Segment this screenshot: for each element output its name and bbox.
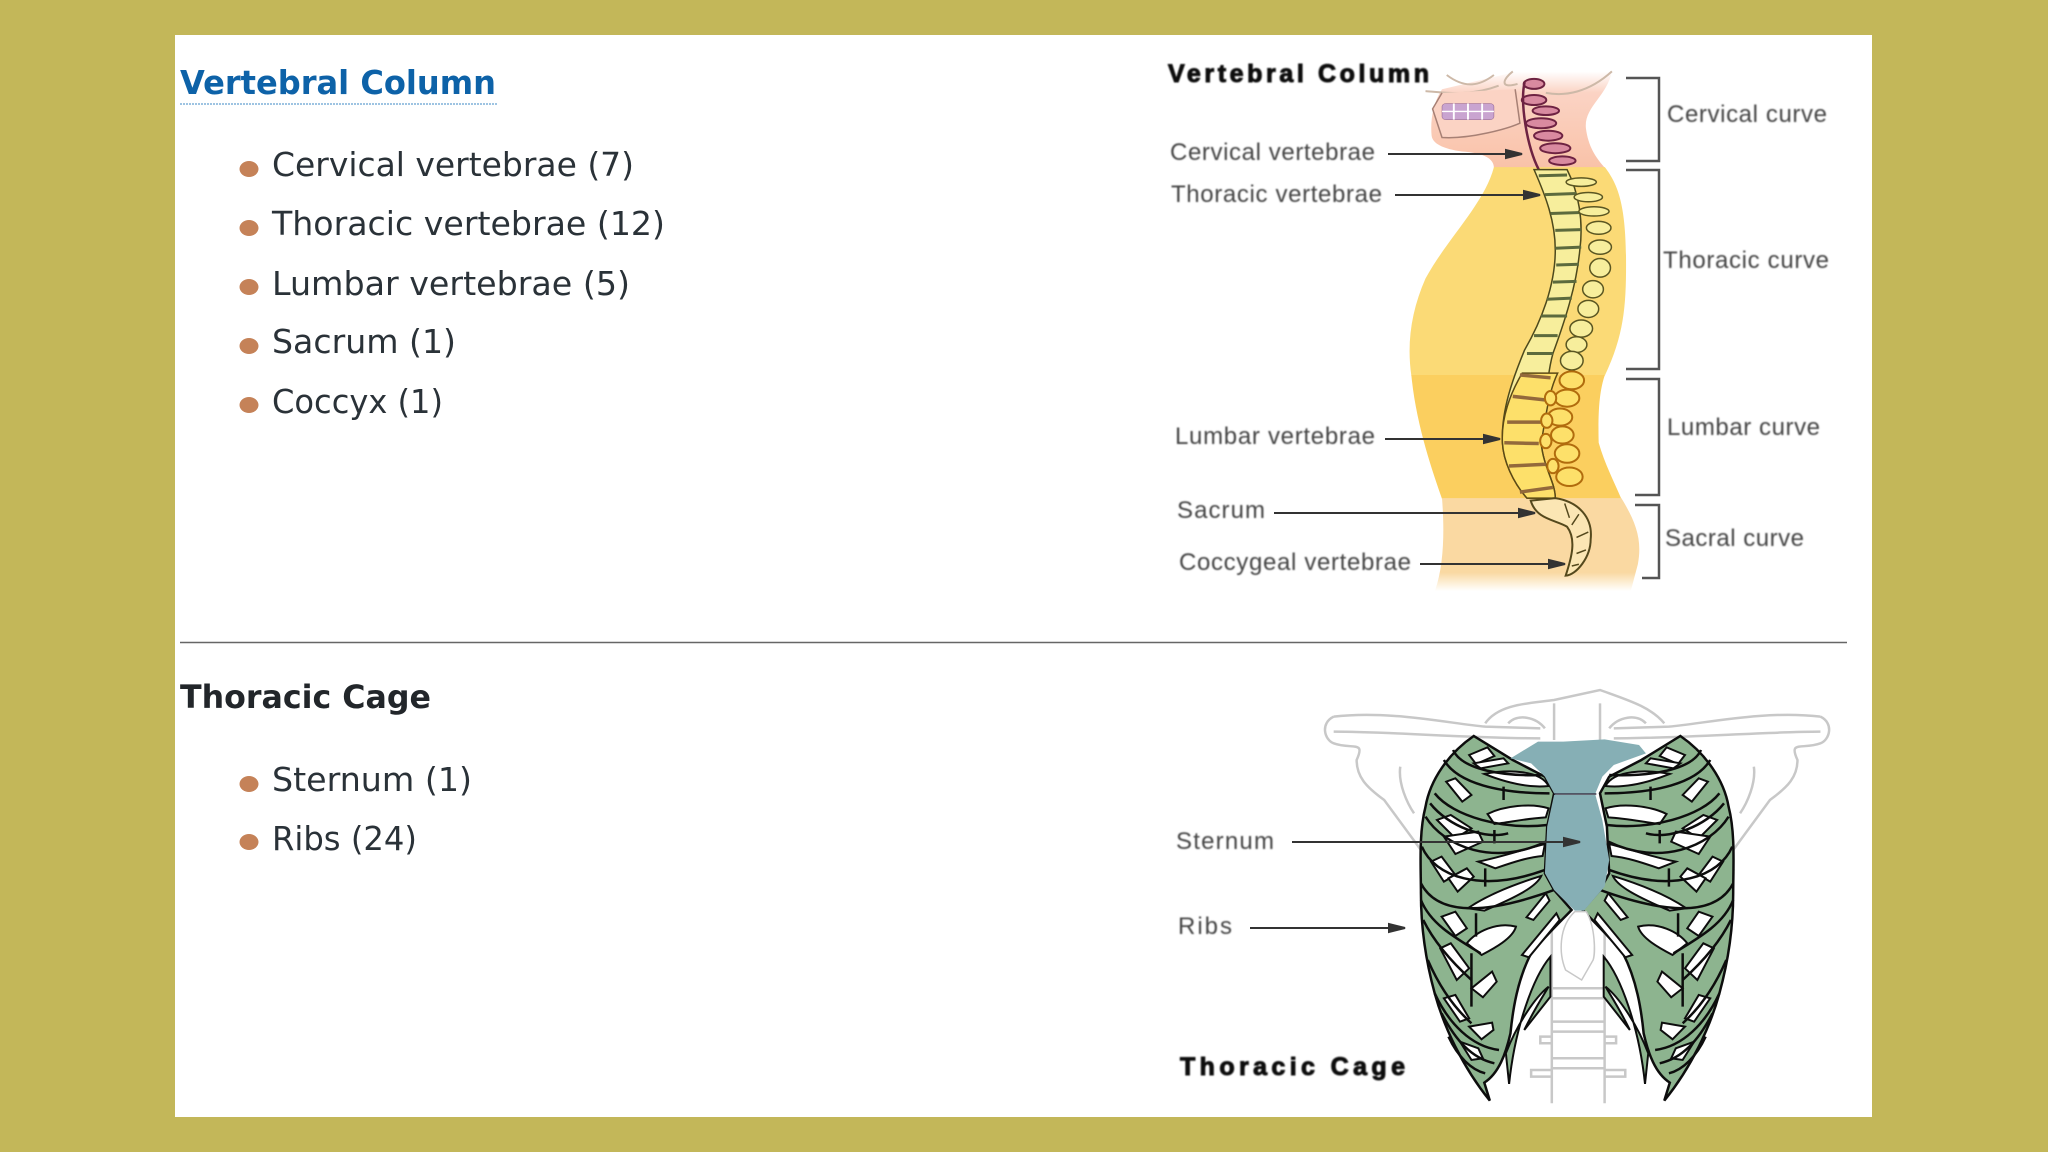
- heading: Vertebral Column: Vertebral Column: [180, 63, 496, 102]
- diagram labels: Sacrum: [1177, 497, 1265, 524]
- diagram labels: Thoracic vertebrae: [1171, 181, 1382, 208]
- diagram labels: Sacral curve: [1665, 525, 1804, 552]
- diagram: vertebral column: [1168, 60, 1829, 591]
- list: vertebral column parts: Thoracic vertebrae (12): [271, 204, 665, 243]
- list: vertebral column parts: Lumbar vertebrae (5): [272, 264, 630, 303]
- diagram: thoracic cage: [1176, 690, 1829, 1103]
- rib cage illustration: [1325, 690, 1829, 1103]
- diagram labels: Vertebral Column: [1168, 60, 1429, 88]
- diagram labels: Cervical vertebrae: [1170, 139, 1375, 166]
- arrows: [1274, 150, 1565, 568]
- diagram labels: Thoracic Cage: [1180, 1053, 1405, 1081]
- list: thoracic cage parts: Ribs (24): [272, 819, 417, 858]
- list: vertebral column parts: Sacrum (1): [272, 322, 456, 361]
- diagram labels: Coccygeal vertebrae: [1179, 549, 1411, 576]
- diagram labels: Sternum: [1176, 828, 1274, 855]
- arrows: [1250, 838, 1580, 932]
- list: thoracic cage parts: Sternum (1): [272, 760, 472, 799]
- diagram labels: Cervical curve: [1667, 101, 1827, 128]
- list: thoracic cage parts: [240, 760, 472, 858]
- body and spine illustration: [1410, 71, 1639, 591]
- brackets: [1626, 78, 1659, 578]
- diagram labels: Lumbar curve: [1667, 414, 1820, 441]
- diagram labels: Thoracic curve: [1663, 247, 1829, 274]
- heading: Thoracic Cage: Thoracic Cage: [180, 678, 431, 716]
- diagram labels: [1176, 828, 1405, 1081]
- white content panel: [175, 35, 1872, 1117]
- list: vertebral column parts: Cervical vertebrae (7): [272, 145, 634, 184]
- diagram labels: Lumbar vertebrae: [1175, 423, 1375, 450]
- diagram labels: [1168, 60, 1829, 576]
- list: vertebral column parts: Coccyx (1): [272, 382, 443, 421]
- diagram labels: Ribs: [1178, 913, 1232, 940]
- list: vertebral column parts: [240, 145, 665, 421]
